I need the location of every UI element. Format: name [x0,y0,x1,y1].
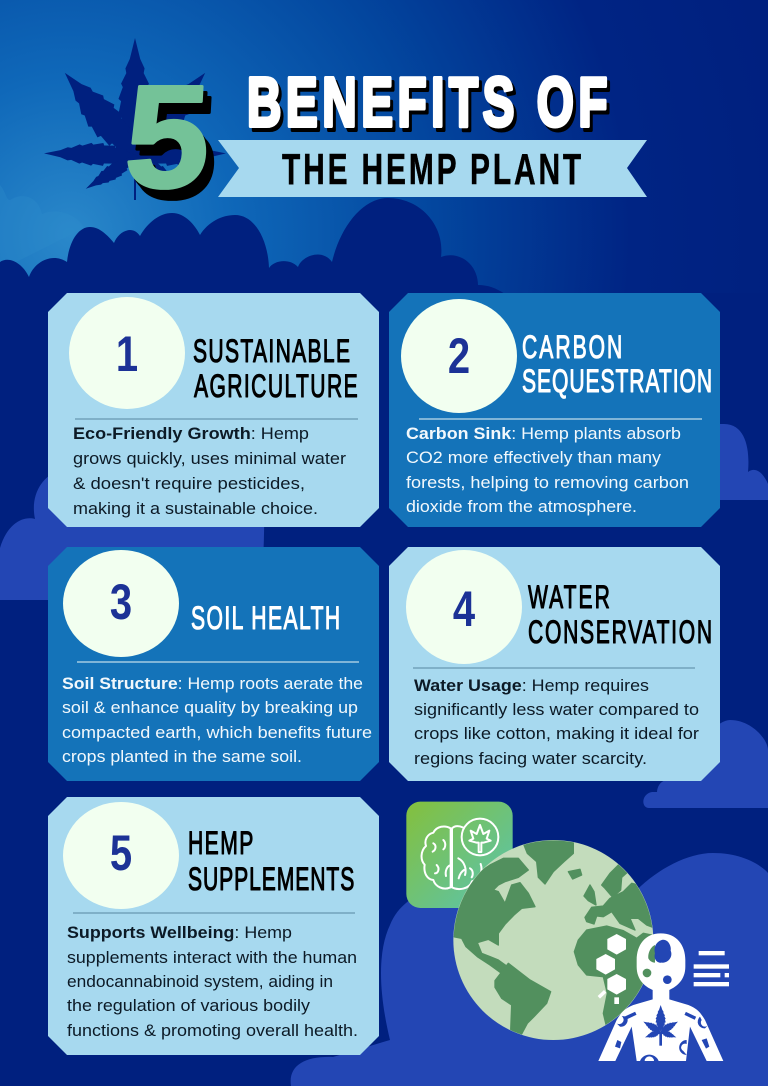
number 1: 1 [116,326,138,382]
big number 5: 5 [121,55,214,218]
number 5: 5 [110,825,132,881]
heading [522,328,712,399]
body text [406,425,689,516]
big number 5: 5 [129,66,222,229]
heading [528,578,712,650]
lighter blue cloud, left [0,470,264,600]
lighter blue cloud, upper right [700,424,768,500]
body text: dioxide from the atmosphere. [406,498,637,516]
number 4: 4 [453,581,475,637]
lighter blue cloud, lower right [643,720,768,808]
heading: HEMP [188,824,253,861]
heading: benefits of: BENEFITS OF [247,63,607,141]
body text: supplements interact with the human [67,949,357,967]
icon: hemp leaf [44,38,226,200]
big number 5: 5 [125,61,218,224]
icon: text lines [694,951,729,986]
body text: Eco-Friendly Growth : Hemp [73,425,309,443]
body text: crops like cotton, making it ideal for [414,725,700,743]
body text: crops planted in the same soil. [62,748,302,766]
illustration group [406,802,729,1061]
icon: globe [447,837,660,1040]
body text: Water Usage : Hemp requires [414,677,649,695]
body text: grows quickly, uses minimal water [73,450,347,468]
panel 5: hemp supplements [48,797,379,1055]
heading: SOIL HEALTH [191,599,340,636]
ribbon banner [218,140,647,197]
body text: endocannabinoid system, aiding in [67,973,333,991]
heading: CONSERVATION [528,613,712,650]
body text: forests, helping to removing carbon [406,474,689,492]
body text: Carbon Sink : Hemp plants absorb [406,425,681,443]
large lighter blue cloud, bottom [291,853,768,1086]
panel 4: water conservation [389,547,720,781]
title group [44,38,647,229]
body text [73,425,347,518]
icon: brain and hemp tile [406,802,513,908]
body text: significantly less water compared to [414,701,699,719]
body text: regions facing water scarcity. [414,750,647,768]
heading: SEQUESTRATION [522,362,712,399]
heading: AGRICULTURE [194,367,358,404]
number 2: 2 [448,328,470,384]
hexagon molecules [596,934,626,1004]
body text: & doesn't require pesticides, [73,475,305,493]
heading [188,824,354,897]
body text: CO2 more effectively than many [406,449,662,467]
body text [62,675,372,766]
panel 1: sustainable agriculture [48,293,379,527]
heading: WATER [528,578,610,615]
heading: SUPPLEMENTS [188,860,354,897]
body text: Soil Structure : Hemp roots aerate the [62,675,363,693]
icon: human body with hemp leaf [598,933,723,1061]
body text: functions & promoting overall health. [67,1022,358,1040]
number 3: 3 [110,574,132,630]
body text: compacted earth, which benefits future [62,724,372,742]
body text: the regulation of various bodily [67,997,311,1015]
panel 3: soil health [48,547,379,781]
body text: soil & enhance quality by breaking up [62,699,358,717]
panel 2: carbon sequestration [389,293,720,527]
heading: CARBON [522,328,622,365]
body text: Supports Wellbeing : Hemp [67,924,292,942]
heading [193,332,358,404]
heading: the hemp plant: THE HEMP PLANT [282,144,581,193]
body text [414,677,700,768]
heading: benefits of: BENEFITS OF [250,67,610,145]
heading: SUSTAINABLE [193,332,350,369]
pale cloud, upper left [0,185,84,270]
body text: making it a sustainable choice. [73,500,318,518]
body text [67,924,358,1040]
